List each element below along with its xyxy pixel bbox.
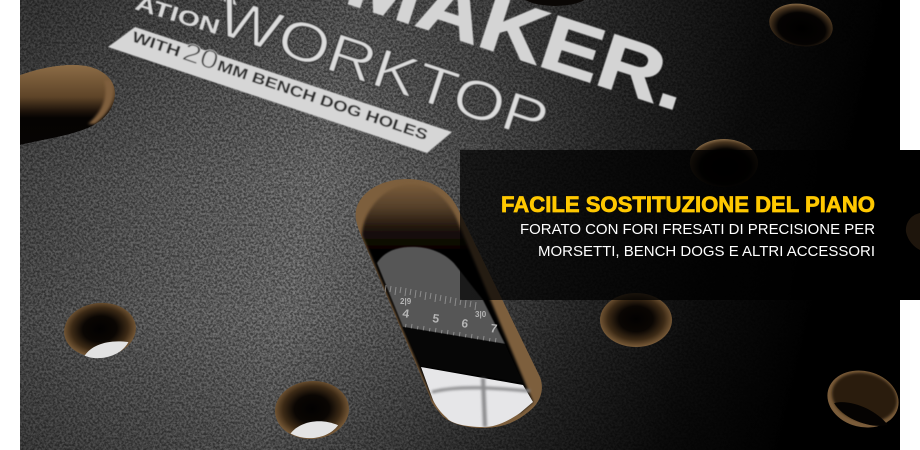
slot inner wall: [362, 184, 533, 413]
ruler numbers: 6: [461, 316, 469, 331]
description line 1: FORATO CON FORI FRESATI DI PRECISIONE PER: [520, 221, 875, 238]
hole: left slot: [20, 65, 115, 145]
ruler numbers: 7: [490, 321, 498, 336]
hole: below panel: [600, 293, 672, 347]
hole: right edge: [906, 213, 920, 250]
window reflection: [432, 378, 530, 427]
hole: main slot: [356, 179, 542, 428]
ruler numbers: [400, 298, 498, 332]
hole: behind panel top: [690, 139, 758, 172]
ruler surface seen through slot: [377, 247, 505, 344]
caption panel: [460, 150, 920, 300]
black square arm: [403, 327, 504, 344]
ruler numbers: 3|0: [475, 310, 487, 319]
ruler numbers: 4: [402, 306, 410, 321]
ruler ticks: [385, 285, 496, 344]
hole: top right: [769, 4, 833, 46]
hole: lower left: [64, 302, 136, 358]
white floor: [421, 367, 533, 427]
heading: FACILE SOSTITUZIONE DEL PIANO: [501, 192, 875, 217]
printed worktop lettering: [108, 0, 699, 153]
strip text: MM BENCH DOG HOLES: MM BENCH DOG HOLES: [215, 57, 430, 144]
label strip: [108, 19, 452, 153]
ruler numbers: 2|9: [400, 297, 412, 306]
hole: top edge: [526, 0, 584, 6]
strip text: 20: 20: [179, 36, 223, 76]
slot rim: [356, 179, 542, 428]
ruler numbers: 5: [432, 311, 440, 326]
strip text: WITH: WITH: [130, 29, 183, 61]
hole: bottom centre: [275, 381, 349, 439]
hole: lower right: [827, 370, 899, 428]
surface grain: [20, 0, 663, 450]
description line 2: MORSETTI, BENCH DOGS E ALTRI ACCESSORI: [538, 243, 875, 260]
board shading: [20, 0, 674, 450]
